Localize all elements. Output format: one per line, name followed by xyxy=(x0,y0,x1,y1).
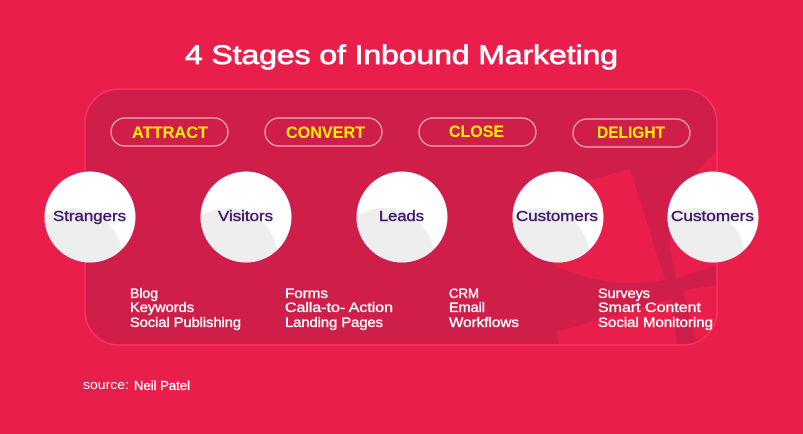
list: delight tactics: Smart Content xyxy=(598,300,701,315)
source: source: xyxy=(83,378,129,392)
list: convert tactics: Forms xyxy=(285,286,328,301)
list: convert tactics: Calla-to- Action xyxy=(285,300,393,315)
background shapes xyxy=(553,148,719,346)
circle: customers delight: Customers xyxy=(671,208,754,225)
list: close tactics: Email xyxy=(449,300,485,315)
pill: convert: CONVERT xyxy=(286,124,365,142)
pill: attract: ATTRACT xyxy=(132,124,208,142)
pill: convert xyxy=(265,118,382,146)
circle: customers close xyxy=(512,172,604,262)
circle: customers close: Customers xyxy=(516,208,598,225)
pill: delight: DELIGHT xyxy=(597,124,665,142)
list: attract tactics: Keywords xyxy=(130,300,194,315)
circle: leads xyxy=(356,172,448,262)
circle: visitors: Visitors xyxy=(218,208,273,225)
list: delight tactics: Surveys xyxy=(598,286,650,301)
circle: customers delight xyxy=(668,172,758,262)
list: convert tactics xyxy=(285,286,393,330)
list: close tactics: Workflows xyxy=(449,315,519,330)
panel: stages xyxy=(85,89,719,346)
list: delight tactics: Social Monitoring xyxy=(598,315,713,330)
pill: close: CLOSE xyxy=(449,123,504,141)
circle: strangers xyxy=(44,172,136,262)
circle: strangers: Strangers xyxy=(53,208,126,225)
circle: leads: Leads xyxy=(379,208,424,225)
title: 4 Stages of Inbound Marketing xyxy=(185,40,618,70)
list: attract tactics xyxy=(130,286,241,330)
list: close tactics xyxy=(449,286,519,330)
source xyxy=(83,378,190,393)
list: convert tactics: Landing Pages xyxy=(285,315,383,330)
list: delight tactics xyxy=(598,286,713,330)
list: attract tactics: Social Publishing xyxy=(130,315,241,330)
pill: attract xyxy=(111,118,228,146)
list: close tactics: CRM xyxy=(449,286,479,301)
circle: visitors xyxy=(200,172,292,262)
pill: delight xyxy=(573,119,690,147)
infographic xyxy=(44,44,758,390)
list: attract tactics: Blog xyxy=(130,286,158,301)
source: Neil Patel xyxy=(134,379,190,393)
pill: close xyxy=(419,118,536,146)
